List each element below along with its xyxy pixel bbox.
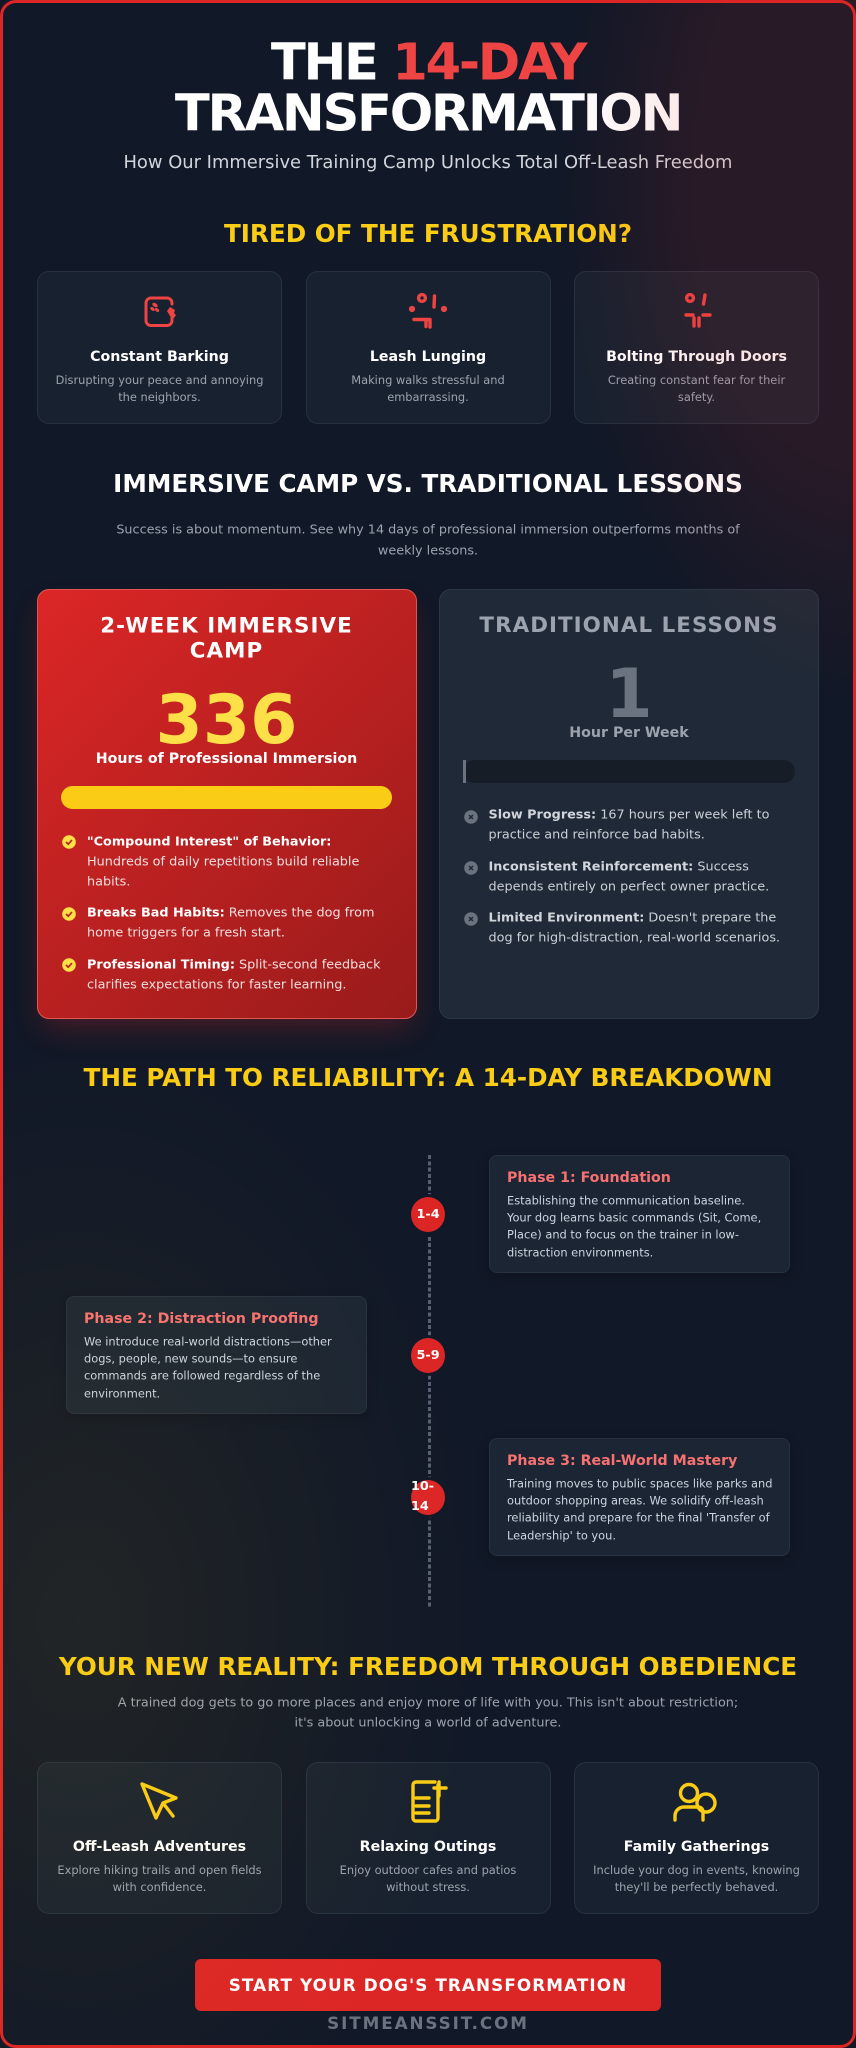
constant barking text: Disrupting your peace and annoying [56, 372, 263, 386]
bar: camp hours [61, 786, 392, 808]
bullet: professional timing [87, 957, 381, 992]
panel: phase 3 [489, 1438, 790, 1556]
bullet: inconsistent reinforcement: Inconsistent Reinforcement: Success [488, 859, 749, 874]
comparison intro text: Success is about momentum. See why 14 days of professional immersion outperforms months of [116, 522, 740, 538]
timeline dot: days 10-14 [411, 1480, 445, 1515]
camp heading: 2-WEEK IMMERSIVE [100, 613, 353, 638]
bullet: limited environment: dog for high-distraction, real-world scenarios. [488, 931, 780, 946]
phase 1 text: distraction environments. [507, 1245, 653, 1259]
bullet: professional timing: Professional Timing: Split-second feedback [87, 957, 381, 972]
panel: bolting through doors [574, 271, 819, 424]
icon: check 3 [62, 958, 76, 972]
comparison intro text [116, 522, 740, 558]
bullet: compound interest: habits. [87, 875, 130, 890]
bar: traditional hours [463, 760, 795, 783]
timeline dot: days 5-9 [411, 1338, 445, 1373]
off-leash title: Off-Leash Adventures [73, 1839, 246, 1855]
off-leash text [57, 1862, 262, 1894]
bullet: professional timing: clarifies expectations for faster learning. [87, 978, 346, 992]
bullet: slow progress [488, 808, 769, 843]
heading: comparison: IMMERSIVE CAMP VS. TRADITIONAL LESSONS [113, 468, 743, 498]
camp heading [100, 613, 353, 664]
bullet: breaks bad habits: home triggers for a fresh start. [87, 926, 285, 941]
family gatherings text: they'll be perfectly behaved. [615, 1880, 778, 1894]
phase 3 title: Phase 3: Real-World Mastery [507, 1453, 737, 1469]
relaxing outings text: without stress. [386, 1880, 470, 1894]
bullet: compound interest: Hundreds of daily repetitions build reliable [87, 854, 359, 869]
bolting text: safety. [678, 390, 715, 404]
bullet: compound interest [87, 834, 359, 890]
bullet: breaks bad habits [87, 906, 374, 941]
days 1-4 label: 1-4 [416, 1207, 440, 1222]
icon: cross 2 [464, 861, 478, 875]
relaxing outings title: Relaxing Outings [360, 1839, 496, 1855]
icon: cross 1 [464, 810, 478, 824]
off-leash text: with confidence. [113, 1880, 206, 1894]
family gatherings text [593, 1862, 800, 1894]
panel: phase 1 [489, 1155, 790, 1273]
new reality intro text: A trained dog gets to go more places and enjoy more of life with you. This isn't about restriction; [118, 1695, 738, 1710]
phase 3 text: reliability and prepare for the final 'Transfer of [507, 1511, 770, 1525]
bullet: breaks bad habits: Breaks Bad Habits: Removes the dog from [87, 906, 374, 921]
leash lunging text: embarrassing. [387, 390, 469, 404]
phase 3 text: Leadership' to you. [507, 1528, 616, 1542]
family gatherings title: Family Gatherings [624, 1839, 769, 1855]
panel: off-leash adventures [37, 1762, 282, 1914]
heading: new reality: YOUR NEW REALITY: FREEDOM THROUGH OBEDIENCE [59, 1652, 797, 1681]
subtitle: How Our Immersive Training Camp Unlocks Total Off-Leash Freedom [123, 152, 732, 173]
days 10-14 label: 14 [411, 1499, 429, 1514]
camp stat label: Hours of Professional Immersion [96, 750, 357, 766]
phase 1 text: Your dog learns basic commands (Sit, Come, [507, 1211, 761, 1225]
days 5-9 label: 5-9 [416, 1348, 440, 1363]
panel: family gatherings [574, 1762, 819, 1914]
days 10-14 label [411, 1479, 434, 1514]
icon: cross 3 [464, 912, 478, 926]
stat: 336: 336 [156, 681, 297, 760]
phase 2 text: dogs, people, new sounds—to ensure [84, 1352, 297, 1366]
constant barking text [56, 372, 263, 404]
family gatherings text: Include your dog in events, knowing [593, 1862, 800, 1876]
icon: cursor arrow [140, 1782, 178, 1820]
relaxing outings text [340, 1862, 516, 1894]
phase 2 title: Phase 2: Distraction Proofing [84, 1311, 319, 1327]
bullet: compound interest: "Compound Interest" of Behavior: [87, 834, 331, 849]
phase 3 text: Training moves to public spaces like parks and [507, 1477, 772, 1491]
timeline line [428, 1155, 431, 1607]
icon: bolting [684, 292, 712, 328]
title [175, 32, 681, 144]
panel: leash lunging [306, 271, 550, 424]
icon: barking paw square [144, 296, 176, 327]
stat: 1: 1 [605, 655, 653, 734]
phase 2 text [84, 1335, 332, 1400]
phase 3 text [506, 1477, 772, 1542]
new reality intro text: it's about unlocking a world of adventure. [295, 1716, 561, 1730]
comparison intro text: weekly lessons. [378, 543, 478, 558]
phase 1 text: Place) and to focus on the trainer in low- [507, 1228, 739, 1242]
icon: people [673, 1782, 717, 1822]
relaxing outings text: Enjoy outdoor cafes and patios [340, 1862, 516, 1876]
leash lunging text [351, 372, 505, 404]
off-leash text: Explore hiking trails and open fields [57, 1862, 262, 1876]
phase 2 text: commands are followed regardless of the [84, 1369, 320, 1383]
bullet: inconsistent reinforcement [488, 859, 769, 894]
leash lunging text: Making walks stressful and [351, 372, 505, 386]
icon: check 1 [62, 835, 76, 849]
icon: check 2 [62, 907, 76, 921]
bullet: limited environment [488, 911, 780, 946]
title: THE 14-DAY [271, 32, 585, 92]
panel: immersive camp [37, 589, 417, 1019]
panel: relaxing outings [306, 1762, 550, 1914]
phase 1 text: Establishing the communication baseline. [507, 1194, 745, 1208]
bullet: slow progress: practice and reinforce bad habits. [488, 828, 705, 843]
phase 1 text [507, 1194, 761, 1259]
new reality intro text [118, 1695, 738, 1730]
panel: traditional lessons [439, 589, 819, 1019]
footer site name: SITMEANSSIT.COM [327, 2013, 529, 2033]
bolting title: Bolting Through Doors [606, 349, 787, 365]
cta button [195, 1959, 661, 2011]
days 10-14 label: 10- [411, 1479, 434, 1494]
phase 1 title: Phase 1: Foundation [507, 1170, 671, 1186]
leash lunging title: Leash Lunging [370, 349, 486, 365]
phase 2 text: environment. [84, 1386, 160, 1400]
title: TRANSFORMATION [175, 84, 681, 144]
heading: frustration: TIRED OF THE FRUSTRATION? [224, 219, 632, 248]
bullet: inconsistent reinforcement: depends entirely on perfect owner practice. [488, 880, 769, 894]
icon: leash lunging [408, 292, 448, 329]
heading: path: THE PATH TO RELIABILITY: A 14-DAY BREAKDOWN [84, 1063, 772, 1092]
bolting text: Creating constant fear for their [608, 372, 785, 386]
constant barking title: Constant Barking [90, 349, 229, 365]
bullet: limited environment: Limited Environment: Doesn't prepare the [488, 911, 776, 926]
bolting text [608, 372, 786, 404]
panel: phase 2 [66, 1296, 367, 1414]
icon: document plus [411, 1780, 448, 1823]
camp heading: CAMP [190, 638, 263, 664]
bullet: slow progress: Slow Progress: 167 hours per week left to [488, 808, 769, 823]
phase 2 text: We introduce real-world distractions—other [84, 1335, 332, 1349]
constant barking text: the neighbors. [118, 390, 201, 404]
cta button: START YOUR DOG'S TRANSFORMATION [229, 1975, 627, 1995]
traditional heading: TRADITIONAL LESSONS [479, 612, 779, 638]
traditional stat label: Hour Per Week [569, 724, 689, 740]
panel: constant barking [37, 271, 282, 424]
phase 3 text: outdoor shopping areas. We solidify off-leash [507, 1494, 764, 1508]
timeline dot: days 1-4 [411, 1197, 445, 1232]
